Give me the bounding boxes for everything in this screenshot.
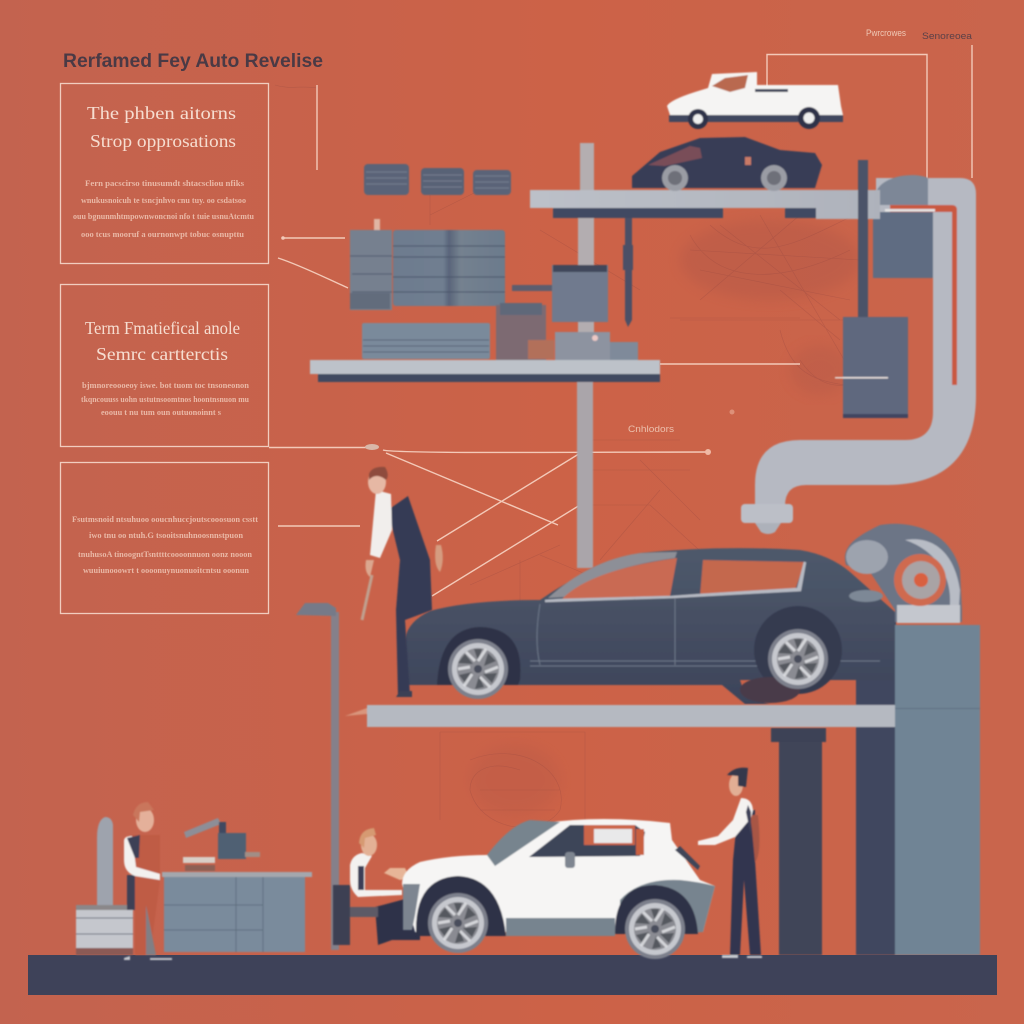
bench machine [183,818,260,871]
engine machine [845,524,962,623]
panel: shop operations [60,84,268,264]
hanging tool [623,218,633,327]
mechanic standing at white car [698,768,762,958]
white car on top [667,72,843,129]
panel 1 body text [73,179,255,239]
panel 3 body text: wuuiunooowrt t oooonuynuonuoitcntsu ooonun [83,566,250,575]
top right labels: Senoreoea [922,31,972,41]
large tyre stacks [350,219,505,359]
upper shelf [530,190,880,219]
car body [405,548,895,704]
dark car on shelf [632,137,822,191]
title: Rerfamed Fey Auto Revelise [63,50,323,72]
vertical pole [577,143,594,568]
middle shelf [310,360,660,382]
panel 2 heading [85,318,240,364]
scene: large dark car on lift [345,524,980,955]
hanging rod and dark box [835,160,908,418]
panel 1 body text: Fern pacscirso tinusumdt shtacscliou nfiks [85,179,244,188]
pipe [755,178,976,510]
panel 2 body text [81,381,250,417]
wheel arches [416,876,506,936]
panel 1 heading: The phben aitorns [87,103,236,123]
lift column [856,620,980,955]
faint sketch lines [275,85,860,827]
callout lines [269,45,972,596]
panel 1 body text: ouu bgnunmhtmpownwoncnoi nfo t tuie usnuAtcmtu [73,212,255,221]
scene: workbench [76,802,420,960]
panel 2 body text: bjmnoreoooeoy iswe. bot tuom toc tnsoneonon [82,381,250,390]
seated worker [333,828,420,945]
panel 2 heading: Semrc cartterctis [96,344,228,364]
panel 3 body text: iwo tnu oo ntuh.G tsooitsnuhnoosnnstpuon [89,531,244,540]
windshield [487,820,560,866]
top right labels [866,28,972,41]
panel 1 heading: Strop opprosations [90,131,236,151]
central label: Cnhlodors [628,424,675,434]
panel 2 heading: Term Fmatiefical anole [85,318,240,338]
lift platform and support [345,705,895,955]
panel 1 body text: wnukusnoicuh te tsncjnhvo cnu tuy. oo csdatsoo [81,196,246,205]
white car [402,819,715,959]
pipe flange [741,504,793,534]
grey trim [506,880,715,936]
panel 1 body text: ooo tcus mooruf a ournonwpt tobuc osnupttu [81,230,245,239]
mechanic on lift [362,467,443,697]
wheel arches and wheels [437,606,842,703]
lamp post [296,603,339,950]
worker at bench [124,802,172,960]
small tyre stacks [364,164,511,195]
upper right machine box [873,175,935,278]
scene: upper rack and pipe [310,72,976,568]
panel 2 body text: eoouu t nu tum oun outuonoinnt s [101,408,221,417]
panel 3 body text: tnuhusoA tinoogntTsnttttcoooonnuon oonz nooon [78,550,253,559]
side windows [529,825,645,868]
taillight [849,590,883,602]
shelf equipment [496,265,638,360]
windows [545,552,805,601]
panel: third text block [60,462,268,614]
cabinet and duct [76,817,133,955]
top right labels: Pwrcrowes [866,28,906,38]
floor [28,955,997,995]
panel 3 body text: Fsutmsnoid ntsuhuoo ooucnhuccjoutscooosuon csstt [72,515,258,524]
panel 3 body text [72,515,258,575]
panel 2 body text: tkqncouuss uohn ustutnsoomtnos hoontnsnuon mu [81,395,250,404]
door lines [530,598,880,666]
panel: financial service [60,284,268,446]
desk [162,872,312,952]
pipe red stripe [890,205,957,385]
panel 1 heading [87,103,236,151]
